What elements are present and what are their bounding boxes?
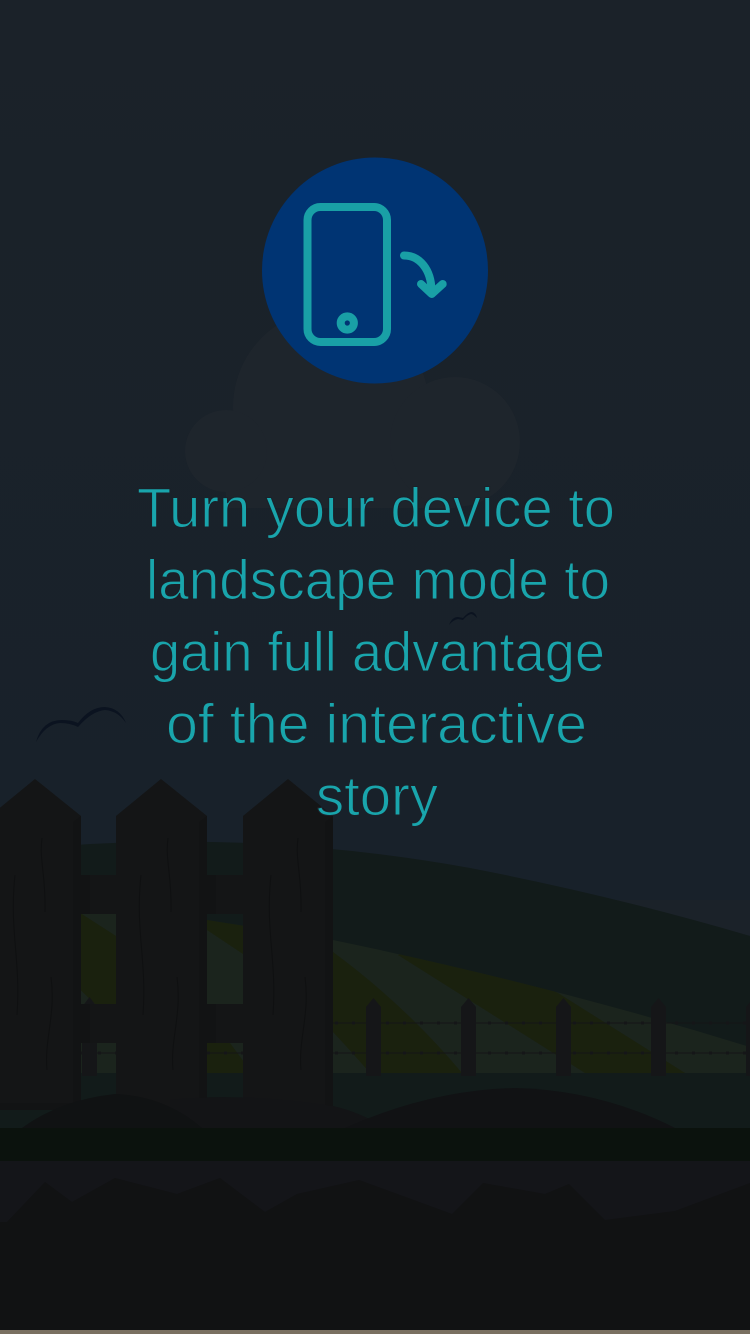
picket side shading <box>73 816 333 1110</box>
picket 2 <box>116 779 207 1110</box>
yellow crop band right <box>398 954 684 1073</box>
jagged foreground silhouette <box>0 1178 750 1330</box>
instruction text: Turn your device to <box>137 476 615 539</box>
mound left <box>22 1094 202 1128</box>
wires <box>81 1023 750 1053</box>
wood grain <box>13 838 306 1070</box>
mound behind centre <box>170 1097 385 1128</box>
dark grass strip <box>0 1128 750 1161</box>
rails <box>0 875 333 1043</box>
distant hill <box>0 842 750 1130</box>
phone outline <box>308 207 387 342</box>
cloud <box>185 309 520 508</box>
instruction text: story <box>316 764 438 827</box>
instruction text: landscape mode to <box>146 548 610 611</box>
instruction text: of the interactive <box>166 692 587 755</box>
instruction text <box>137 476 615 827</box>
foreground mounds <box>22 1088 675 1128</box>
bird large <box>36 707 126 742</box>
picket 1 <box>0 779 81 1110</box>
crop field <box>81 914 746 1073</box>
icon background circle <box>262 158 488 384</box>
foreground strip behind gate <box>0 1103 81 1110</box>
yellow crop band left <box>81 914 243 1073</box>
sky background <box>0 0 750 900</box>
wooden gate <box>0 779 333 1110</box>
lower ground <box>0 1161 750 1331</box>
instruction text: gain full advantage <box>150 620 605 683</box>
barbed-wire fence <box>81 997 750 1076</box>
barbs <box>81 1023 750 1053</box>
mound right <box>345 1088 675 1128</box>
icon: rotate device <box>262 158 488 384</box>
bottom edge strip <box>0 1330 750 1334</box>
rail shadows <box>81 875 216 1043</box>
phone home button <box>341 316 354 330</box>
yellow crop band centre <box>207 920 461 1073</box>
bird small <box>449 612 477 625</box>
picket 3 <box>243 779 333 1110</box>
rotation arrow <box>404 256 443 294</box>
posts <box>82 997 750 1076</box>
